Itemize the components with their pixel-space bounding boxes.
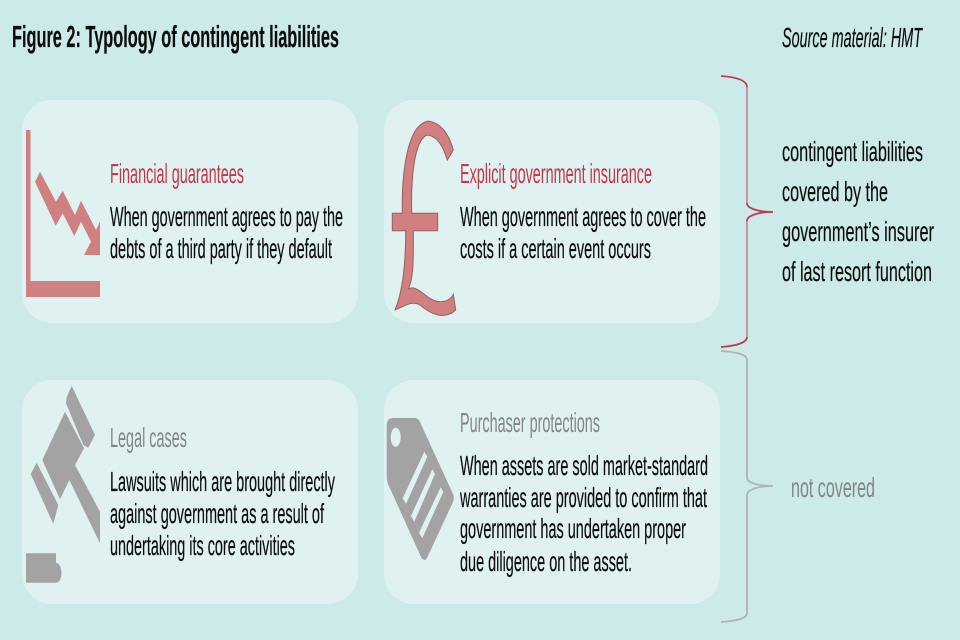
description: undertaking its core activities: [110, 530, 295, 561]
panel background: [22, 380, 358, 604]
panel background: [22, 100, 358, 323]
covered label: [782, 136, 934, 287]
panel background: [384, 380, 720, 604]
description: [110, 466, 335, 561]
description: warranties are provided to confirm that: [459, 482, 707, 513]
description: [460, 201, 706, 264]
description: When assets are sold market-standard: [460, 450, 708, 481]
panel: explicit government insurance: [384, 100, 720, 323]
icon: pound sign: [392, 121, 456, 315]
description: due diligence on the asset.: [460, 546, 632, 577]
description: Lawsuits which are brought directly: [110, 466, 335, 497]
brace: covered: [721, 76, 773, 347]
icon: gavel: [26, 386, 100, 583]
description: government has undertaken proper: [460, 513, 686, 544]
description: costs if a certain event occurs: [460, 233, 651, 264]
panel: purchaser protections: [384, 380, 720, 604]
icon: price tag: [387, 418, 454, 560]
heading: Financial guarantees: [110, 158, 244, 189]
description: against government as a result of: [110, 498, 324, 529]
panel: legal cases: [22, 380, 358, 604]
heading: Purchaser protections: [460, 407, 600, 438]
heading: Explicit government insurance: [460, 158, 652, 189]
heading: Legal cases: [110, 422, 187, 453]
icon: falling chart: [26, 130, 100, 297]
panel: financial guarantees: [22, 100, 358, 323]
description: [110, 201, 343, 264]
panel background: [384, 100, 720, 323]
brace: not covered: [721, 351, 773, 622]
description: debts of a third party if they default: [110, 233, 332, 264]
title: Figure 2: Typology of contingent liabilities: [12, 19, 339, 54]
not covered label: not covered: [791, 472, 875, 503]
description: [459, 450, 708, 577]
description: When government agrees to pay the: [110, 201, 343, 232]
description: When government agrees to cover the: [460, 201, 706, 232]
